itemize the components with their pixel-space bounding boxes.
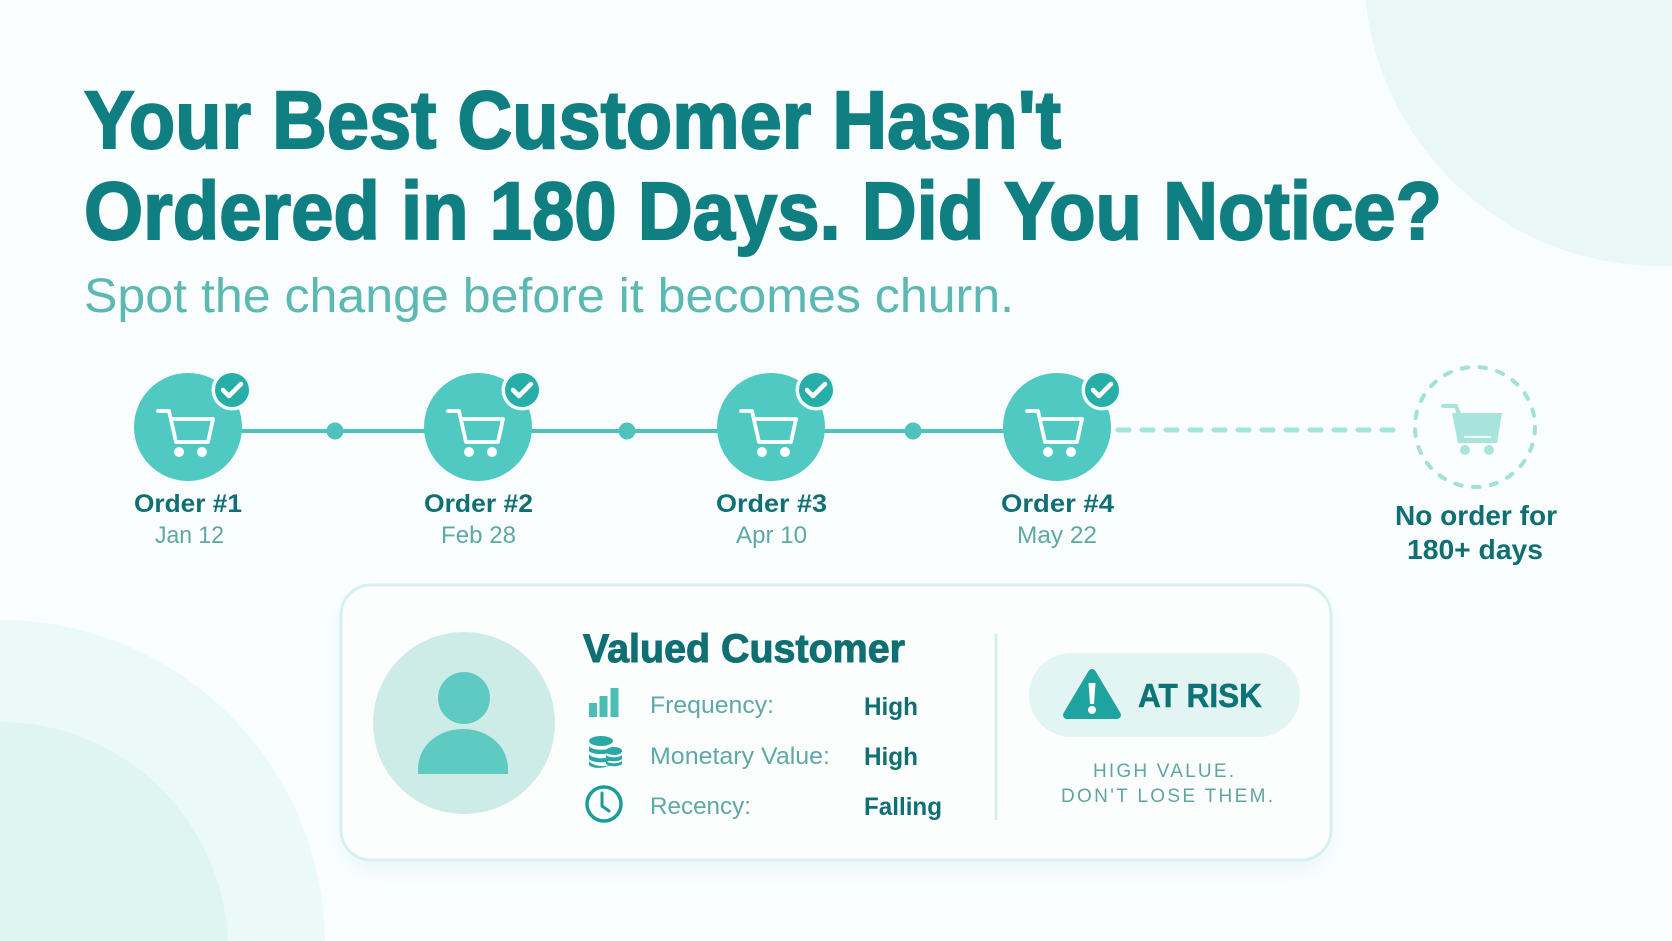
icon: check badge — [796, 370, 836, 410]
row: monetary value: Monetary Value: — [650, 743, 830, 770]
title — [84, 75, 1442, 257]
row: recency: Falling — [864, 793, 942, 821]
caption: HIGH VALUE. — [1093, 761, 1234, 782]
date: Feb 28 — [441, 522, 516, 549]
row: recency: Recency: — [650, 793, 751, 820]
icon: clock — [587, 787, 621, 821]
card shadow — [344, 596, 1328, 868]
label: Order #2 — [424, 490, 533, 518]
badge: at risk: AT RISK — [1138, 677, 1262, 714]
icon: cart — [158, 411, 213, 457]
badge: at risk — [1029, 653, 1300, 737]
missing order — [1395, 367, 1557, 565]
row: recency — [587, 787, 942, 821]
order 2 — [424, 370, 542, 549]
label: Order #1 — [134, 490, 242, 518]
title: Ordered in 180 Days. Did You Notice? — [84, 166, 1442, 257]
icon: bars — [589, 688, 618, 717]
label — [1395, 500, 1557, 565]
icon: coins — [589, 736, 622, 768]
heading: valued customer: Valued Customer — [583, 627, 905, 671]
row: monetary value: High — [864, 743, 918, 771]
timeline connector: solid line — [240, 422, 1005, 440]
subtitle: Spot the change before it becomes churn. — [84, 270, 1014, 323]
icon: cart — [741, 411, 796, 457]
icon: customer avatar — [373, 632, 555, 814]
row: frequency — [589, 688, 918, 721]
icon: warning triangle — [1067, 673, 1117, 715]
icon: cart — [1027, 411, 1082, 457]
caption — [1061, 761, 1273, 807]
title: Your Best Customer Hasn't — [84, 75, 1061, 166]
icon: cart — [448, 411, 503, 457]
order 3 — [716, 370, 836, 549]
label: No order for — [1395, 500, 1557, 531]
order 4 — [1001, 370, 1122, 549]
date: Apr 10 — [736, 522, 807, 549]
date: Jan 12 — [155, 522, 224, 549]
icon: check badge — [502, 370, 542, 410]
row: frequency: High — [864, 693, 918, 721]
icon: check badge — [1082, 370, 1122, 410]
caption: DON'T LOSE THEM. — [1061, 786, 1273, 807]
row: frequency: Frequency: — [650, 692, 774, 719]
background shape: bottom left circles — [0, 620, 325, 941]
icon: faded cart — [1443, 406, 1502, 455]
date: May 22 — [1017, 522, 1097, 549]
icon: check badge — [212, 370, 252, 410]
background shape: top right circle — [1366, 0, 1672, 266]
label: 180+ days — [1407, 534, 1543, 565]
order 1 — [134, 370, 252, 549]
row: monetary value — [589, 736, 918, 771]
label: Order #4 — [1001, 490, 1114, 518]
panel: customer card — [341, 585, 1331, 860]
label: Order #3 — [716, 490, 827, 518]
timeline connector: dashed line — [1118, 428, 1395, 432]
